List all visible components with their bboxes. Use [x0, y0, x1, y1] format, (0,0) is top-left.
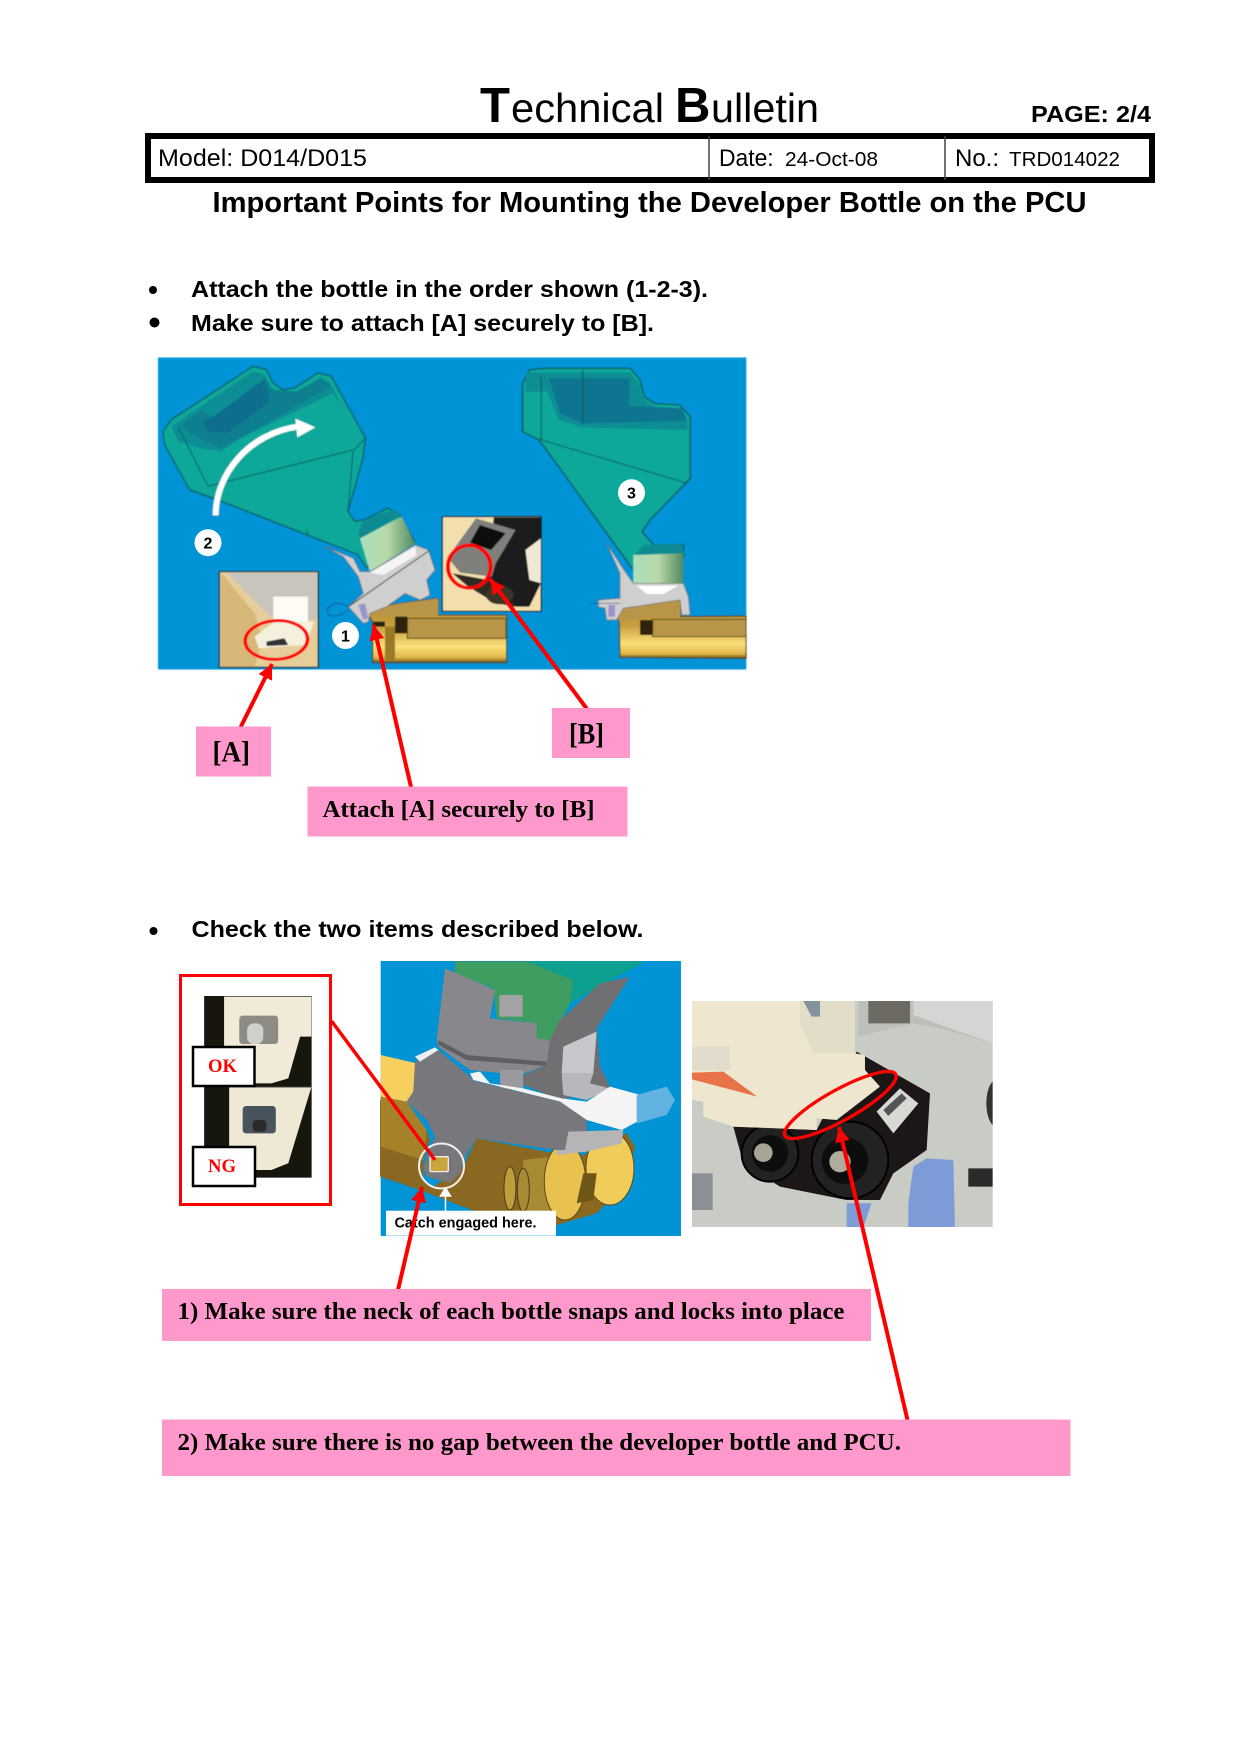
- header table: 24-Oct-08: [785, 148, 878, 171]
- callout [A]: [196, 726, 271, 776]
- step number 2: [194, 529, 222, 556]
- blue part: [908, 1158, 955, 1227]
- cream unit: [692, 1001, 880, 1130]
- red ellipse gap: [777, 1061, 903, 1149]
- catch caption: Catch engaged here.: [394, 1215, 536, 1231]
- PCU right: [615, 600, 746, 658]
- inset photo B: [442, 517, 541, 611]
- title: ulletin: [711, 85, 819, 131]
- neck left and holder: [325, 509, 435, 623]
- black cavity: [733, 1052, 930, 1200]
- body: [407, 1050, 587, 1183]
- rollers: [742, 1125, 798, 1182]
- catch ring: [419, 1144, 464, 1188]
- header table: [148, 136, 1152, 180]
- red circle A: [243, 618, 309, 662]
- step number 2: 2: [204, 536, 213, 552]
- arrow to B: [490, 579, 587, 709]
- line from frame to catch: [332, 1021, 435, 1160]
- catch caption: [386, 1211, 556, 1236]
- green top: [455, 962, 573, 1040]
- step number 3: [618, 479, 645, 506]
- catch hole: [430, 1157, 448, 1172]
- arrow item 1: [398, 1187, 422, 1290]
- arrow item 2: [839, 1127, 908, 1420]
- arrow rotate: [216, 419, 315, 515]
- callout [A]: [A]: [212, 736, 250, 768]
- arrow to A: [241, 664, 272, 727]
- OK NG frame: [180, 976, 330, 1204]
- title: echnical: [511, 85, 664, 131]
- tag: [692, 1072, 757, 1097]
- bottle right: [523, 368, 690, 568]
- red circle B: [448, 545, 491, 588]
- bullet list: Make sure to attach [A] securely to [B].: [191, 310, 654, 336]
- bottle left: [163, 366, 415, 568]
- step number 1: [332, 622, 359, 649]
- OK label: [193, 1047, 254, 1086]
- NG label: NG: [208, 1156, 236, 1177]
- white up arrow: [440, 1188, 450, 1211]
- bullet list: Attach the bottle in the order shown (1-2-3).: [191, 276, 708, 302]
- step number 3: 3: [627, 486, 636, 502]
- PCU left: [365, 598, 507, 663]
- callout item 1: [162, 1289, 871, 1341]
- diagram: catch close-up: [380, 961, 681, 1236]
- title: B: [675, 79, 710, 133]
- callout attach: Attach [A] securely to [B]: [322, 797, 594, 823]
- tube: [380, 1100, 635, 1225]
- NG photo: [204, 1087, 312, 1178]
- white strip: [470, 1072, 647, 1130]
- diagram: mounting steps: [158, 358, 746, 670]
- header table: Date:: [719, 145, 780, 172]
- cylinder: [437, 968, 550, 1075]
- blue cylinder: [637, 1087, 675, 1123]
- header table: Model: D014/D015: [158, 145, 367, 172]
- bullet check: Check the two items described below.: [192, 916, 644, 942]
- fin: [523, 977, 630, 1100]
- neck and holder right: [590, 543, 690, 620]
- NG label: [193, 1147, 255, 1186]
- subtitle: Important Points for Mounting the Developer Bottle on the PCU: [212, 187, 1086, 219]
- header table: TRD014022: [1009, 148, 1120, 171]
- inset photo A: [219, 572, 318, 667]
- callout item 1: 1) Make sure the neck of each bottle snaps and locks into place: [178, 1299, 845, 1325]
- bullet list: [149, 276, 708, 336]
- callout item 2: [162, 1420, 1070, 1476]
- diagram: PCU photo: [692, 1001, 993, 1227]
- label: [877, 1088, 918, 1133]
- arrow to catch: [374, 625, 411, 787]
- step number 1: 1: [341, 628, 350, 646]
- callout [B]: [B]: [569, 718, 604, 750]
- OK photo: [204, 996, 312, 1087]
- title: T: [480, 79, 510, 133]
- page number: PAGE: 2/4: [1031, 101, 1151, 127]
- callout attach: [308, 786, 628, 836]
- header table: No.:: [955, 145, 1006, 172]
- callout [B]: [552, 708, 630, 758]
- OK label: OK: [208, 1056, 237, 1077]
- callout item 2: 2) Make sure there is no gap between the developer bottle and PCU.: [178, 1430, 901, 1456]
